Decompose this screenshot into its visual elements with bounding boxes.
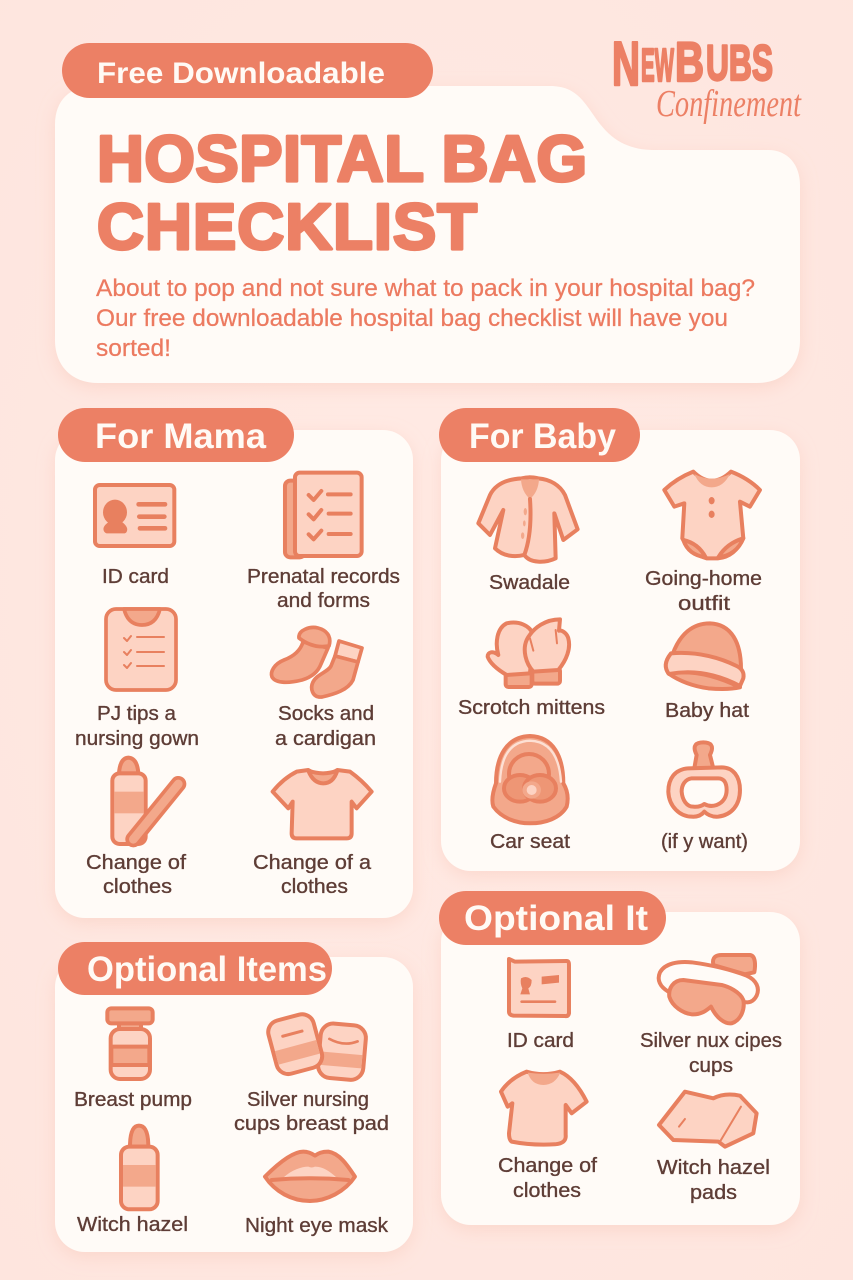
label: Change of clothes: clothes — [103, 876, 172, 898]
icon: baby hat — [666, 623, 744, 689]
label: Scrotch mittens: Scrotch mittens — [458, 697, 605, 719]
label: ID card: ID card — [507, 1030, 574, 1052]
icon: swaddle jacket — [478, 477, 578, 562]
logo: NewBubs Confinement: B — [675, 30, 704, 93]
icon: t-shirt — [273, 770, 372, 838]
heading pill: Free Downloadable: Free Downloadable — [97, 57, 385, 90]
heading: For Baby: For Baby — [469, 417, 617, 456]
logo: NewBubs Confinement: EW — [641, 39, 674, 91]
intro text — [96, 275, 755, 362]
label: Witch hazel: Witch hazel — [77, 1214, 188, 1236]
icon: car seat — [492, 736, 568, 823]
heading pill: Free Downloadable — [62, 43, 433, 98]
label: Witch hazel pads: pads — [690, 1182, 737, 1204]
logo: NewBubs Confinement — [612, 30, 802, 125]
label: Socks and a cardigan: a cardigan — [275, 728, 376, 750]
heading: Optional Items — [58, 942, 332, 995]
icon: ID card small — [509, 959, 569, 1016]
heading: Optional Items: Optional Items — [87, 950, 327, 989]
intro text: About to pop and not sure what to pack in your hospital bag? — [96, 275, 755, 302]
label: Change of a clothes — [253, 852, 372, 898]
label: Going-home outfit: Going-home — [645, 568, 762, 590]
icon: pads — [659, 1092, 757, 1147]
icon: t-shirt — [501, 1072, 587, 1145]
icon: bodysuit — [664, 472, 760, 558]
icon: PJ clipboard — [106, 609, 176, 690]
label: PJ tips a nursing gown: nursing gown — [75, 728, 199, 750]
label: Prenatal records and forms: and forms — [277, 590, 370, 612]
label: Witch hazel pads: Witch hazel — [657, 1157, 770, 1179]
label: Going-home outfit: outfit — [678, 593, 731, 615]
heading: For Mama — [58, 408, 294, 462]
label: Silver nursing cups breast pad: Silver nursing — [247, 1089, 369, 1111]
label: Change of a clothes: Change of a — [253, 852, 372, 874]
title: HOSPITAL BAG — [97, 122, 587, 195]
heading: Optional It — [439, 891, 666, 945]
label: (if y want): (if y want) — [661, 831, 748, 853]
label: Witch hazel pads — [657, 1157, 770, 1204]
label: Change of clothes: clothes — [513, 1180, 581, 1202]
label: Change of a clothes: clothes — [281, 876, 348, 898]
icon: witch hazel bottle — [121, 1126, 158, 1209]
label: Night eye mask: Night eye mask — [245, 1215, 389, 1237]
label: PJ tips a nursing gown: PJ tips a — [97, 703, 177, 725]
icon: socks — [272, 627, 362, 697]
label: Silver nux cipes cups: Silver nux cipes — [640, 1030, 782, 1052]
label: Silver nursing cups breast pad: cups breast pad — [234, 1113, 389, 1135]
panel: For Baby — [439, 408, 800, 871]
panel: Optional It — [439, 891, 800, 1225]
title — [97, 122, 587, 263]
icon: breast pump — [107, 1008, 153, 1079]
label: Prenatal records and forms: Prenatal records — [247, 566, 400, 588]
label: Change of clothes — [498, 1155, 597, 1202]
panel: Optional Items — [55, 942, 413, 1252]
label: Change of clothes: Change of — [86, 852, 186, 874]
heading: For Baby — [439, 408, 640, 462]
heading: For Mama: For Mama — [95, 417, 267, 456]
icon: nursing cups — [266, 1012, 367, 1081]
label: Socks and a cardigan: Socks and — [278, 703, 374, 725]
icon: prenatal records — [285, 473, 362, 557]
icon: pacifier — [668, 742, 740, 817]
label: Change of clothes: Change of — [498, 1155, 597, 1177]
label: PJ tips a nursing gown — [75, 703, 199, 750]
label: Baby hat: Baby hat — [665, 700, 749, 722]
label: Breast pump: Breast pump — [74, 1089, 192, 1111]
icon: bottle and wand — [112, 758, 178, 844]
logo: NewBubs Confinement: N — [612, 30, 640, 99]
label: Prenatal records and forms — [247, 566, 400, 612]
label: Going-home outfit — [645, 568, 762, 615]
label: Swadale: Swadale — [489, 572, 570, 594]
label: Car seat: Car seat — [490, 831, 570, 853]
label: Change of clothes — [86, 852, 186, 898]
icon: mittens — [488, 619, 569, 687]
label: Socks and a cardigan — [275, 703, 376, 750]
title: CHECKLIST — [97, 190, 477, 263]
icon: ID card — [95, 485, 174, 546]
logo: NewBubs Confinement: Confinement — [656, 83, 802, 125]
panel: For Mama — [55, 408, 413, 918]
logo: NewBubs Confinement: UBS — [706, 35, 773, 91]
label: ID card: ID card — [102, 566, 169, 588]
intro text: sorted! — [96, 335, 171, 362]
label: Silver nursing cups breast pad — [234, 1089, 389, 1135]
label: Silver nux cipes cups: cups — [689, 1055, 733, 1077]
label: Silver nux cipes cups — [640, 1030, 782, 1077]
panel: header — [55, 43, 800, 383]
heading: Optional It: Optional It — [464, 899, 648, 938]
icon: eye mask — [659, 955, 758, 1023]
intro text: Our free downloadable hospital bag checklist will have you — [96, 305, 728, 332]
icon: lips — [265, 1152, 355, 1201]
